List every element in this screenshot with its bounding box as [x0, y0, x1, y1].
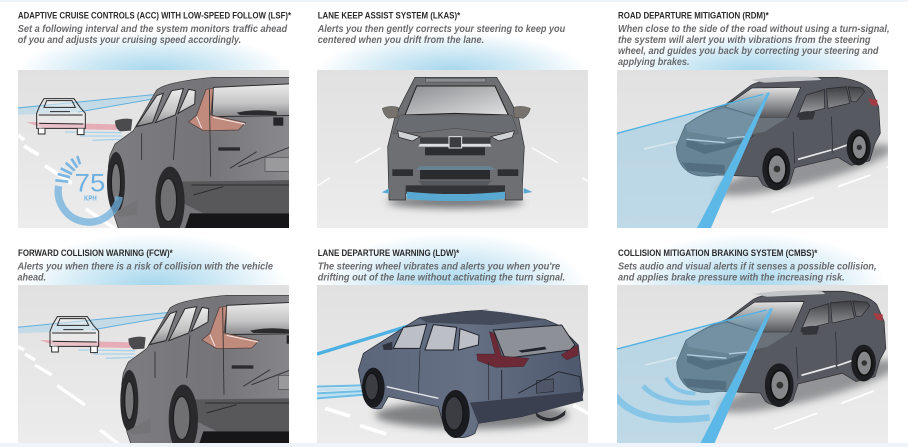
description: ACC: Set a following interval and the system monitors traffic ahead	[18, 23, 288, 35]
illustration: ACC car following a vehicle	[18, 70, 289, 228]
arrow: lane correction band	[382, 188, 532, 201]
icon: speed gauge 75 KPH	[55, 156, 119, 222]
description: LDW: The steering wheel vibrates and alerts you when you're	[318, 260, 560, 272]
panel: lane keep assist	[317, 10, 589, 228]
blue glow behind illustration	[317, 233, 587, 341]
illustration: RDM car with sensor beam	[617, 70, 895, 230]
icon: speed gauge 75 KPH: KPH	[84, 193, 97, 202]
description: RDM: the system will alert you with vibrations from the steering	[618, 34, 871, 46]
description: LDW	[318, 260, 565, 283]
illustration: LDW rear three-quarter car	[317, 285, 589, 443]
panel: collision mitigation braking	[615, 233, 901, 447]
description: FCW: Alerts you when there is a risk of collision with the vehicle	[17, 260, 273, 272]
description: ACC	[18, 23, 288, 46]
heading: RDM: ROAD DEPARTURE MITIGATION (RDM)*	[618, 10, 769, 22]
description: FCW	[17, 260, 273, 283]
heading: LDW: LANE DEPARTURE WARNING (LDW)*	[318, 248, 459, 259]
top page strip	[0, 0, 908, 2]
blue glow behind illustration	[18, 32, 288, 112]
blue glow behind illustration	[617, 233, 887, 341]
description: LKAS	[317, 23, 566, 46]
description: RDM	[618, 23, 890, 68]
panel: adaptive cruise control	[18, 12, 291, 228]
description: CMBS: Sets audio and visual alerts if it senses a possible collision,	[618, 260, 877, 272]
description: LDW: drifting out of the lane without activating the turn signal.	[318, 271, 565, 283]
description: FCW: ahead.	[18, 271, 46, 283]
blue glow behind illustration	[18, 233, 288, 341]
blue glow behind illustration	[617, 32, 887, 112]
description: LKAS: centered when you drift from the lane.	[318, 34, 484, 46]
blue glow behind illustration	[317, 32, 587, 112]
description: ACC: of you and adjusts your cruising speed accordingly.	[18, 34, 241, 46]
description: CMBS	[618, 260, 877, 283]
heading: CMBS: COLLISION MITIGATION BRAKING SYSTEM (CMBS)*	[618, 248, 818, 259]
description: RDM: applying brakes.	[618, 56, 690, 68]
panel: lane departure warning	[317, 233, 589, 443]
heading: ACC: ADAPTIVE CRUISE CONTROLS (ACC) WITH LOW-SPEED FOLLOW (LSF)*	[18, 10, 291, 22]
panel: road departure mitigation	[617, 10, 895, 230]
heading: LKAS: LANE KEEP ASSIST SYSTEM (LKAS)*	[318, 10, 460, 22]
bottom page strip	[0, 443, 908, 447]
panel: forward collision warning	[17, 238, 289, 443]
illustration: FCW car approaching a vehicle	[18, 285, 289, 443]
icon: speed gauge 75 KPH: 75	[75, 169, 105, 197]
illustration: LKAS front view of car	[317, 70, 589, 228]
icon: warning waves	[615, 378, 710, 420]
illustration: CMBS car with warning waves	[615, 285, 901, 447]
description: LKAS: Alerts you then gently corrects your steering to keep you	[317, 23, 566, 35]
description: CMBS: and applies brake pressure with the increasing risk.	[618, 271, 845, 283]
heading: FCW: FORWARD COLLISION WARNING (FCW)*	[18, 248, 173, 259]
